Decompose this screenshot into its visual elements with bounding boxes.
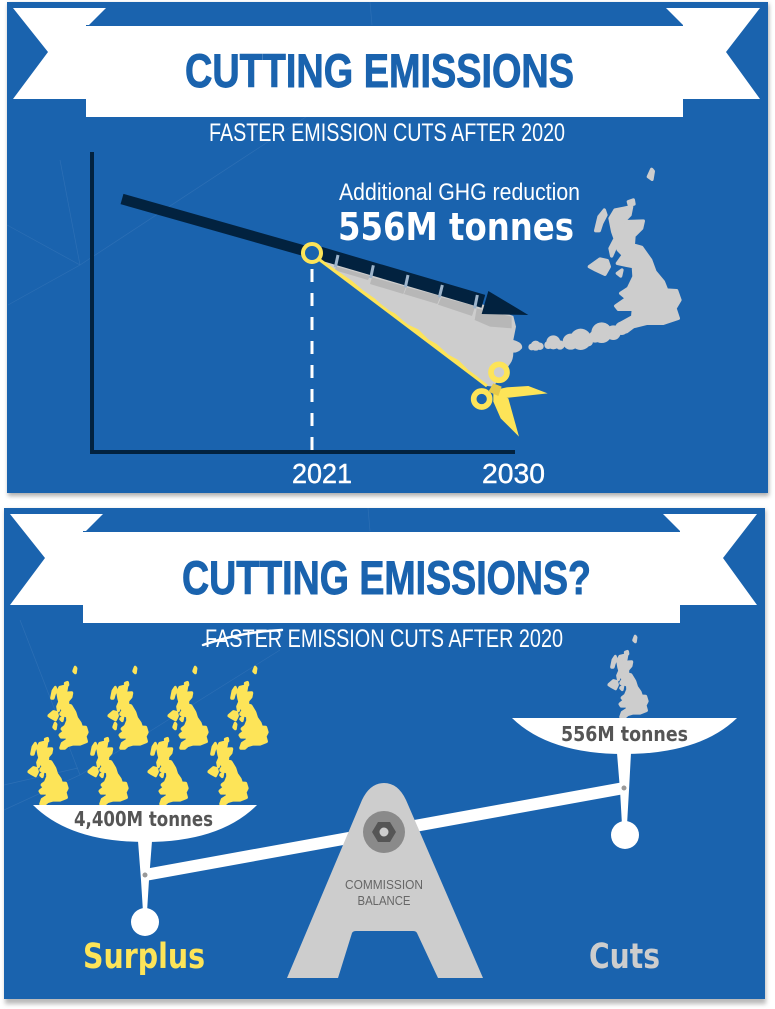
balance beam — [145, 788, 624, 875]
label: cuts: Cuts — [589, 937, 660, 977]
title: CUTTING EMISSIONS — [185, 44, 574, 97]
chart axes — [92, 152, 515, 452]
smoke clouds — [528, 322, 628, 351]
panel: faster emission cuts — [7, 2, 769, 496]
subtitle with struck-out word: FASTER EMISSION CUTS AFTER 2020 — [205, 625, 563, 653]
subtitle: FASTER EMISSION CUTS AFTER 2020 — [209, 119, 565, 147]
right pan: cuts — [512, 637, 737, 849]
yellow UK maps — [29, 668, 267, 804]
dashed marker for 2021 — [310, 269, 314, 450]
title: CUTTING EMISSIONS? — [182, 551, 591, 604]
label: surplus: Surplus — [83, 937, 205, 977]
panel: emission cuts vs surplus balance — [4, 508, 766, 1004]
yellow steeper line — [312, 254, 487, 386]
grey wedge: additional reduction — [313, 255, 522, 387]
banner: bottom ribbon — [10, 514, 757, 623]
icon: UK map dissolving into smoke — [528, 169, 680, 351]
pan bowl — [512, 718, 737, 754]
pan stem and counterweight — [138, 841, 152, 912]
surplus amount: 4,400M tonnes — [74, 807, 213, 831]
label: 2021: 2021 — [292, 458, 352, 489]
pan stem and counterweight — [617, 753, 631, 825]
banner: top ribbon — [13, 8, 760, 117]
callout: additional GHG reduction: Additional GHG reduction — [339, 179, 580, 206]
callout: additional GHG reduction: 556M tonnes — [338, 205, 574, 249]
label: 2030: 2030 — [482, 458, 545, 489]
2021 ring marker — [303, 244, 321, 262]
dark arrow: current trend — [122, 199, 528, 315]
pan bowl — [33, 805, 257, 842]
left pan: surplus — [29, 668, 267, 936]
commission balance fulcrum — [287, 783, 483, 978]
commission balance fulcrum: BALANCE — [358, 894, 410, 908]
grey UK map — [609, 637, 647, 717]
balance label: COMMISSION — [345, 878, 423, 892]
chart: emission trajectory — [92, 152, 528, 452]
cuts amount: 556M tonnes — [561, 722, 688, 746]
callout: additional GHG reduction — [338, 179, 580, 249]
pivot bolt — [363, 811, 405, 853]
icon: scissors — [474, 364, 548, 437]
